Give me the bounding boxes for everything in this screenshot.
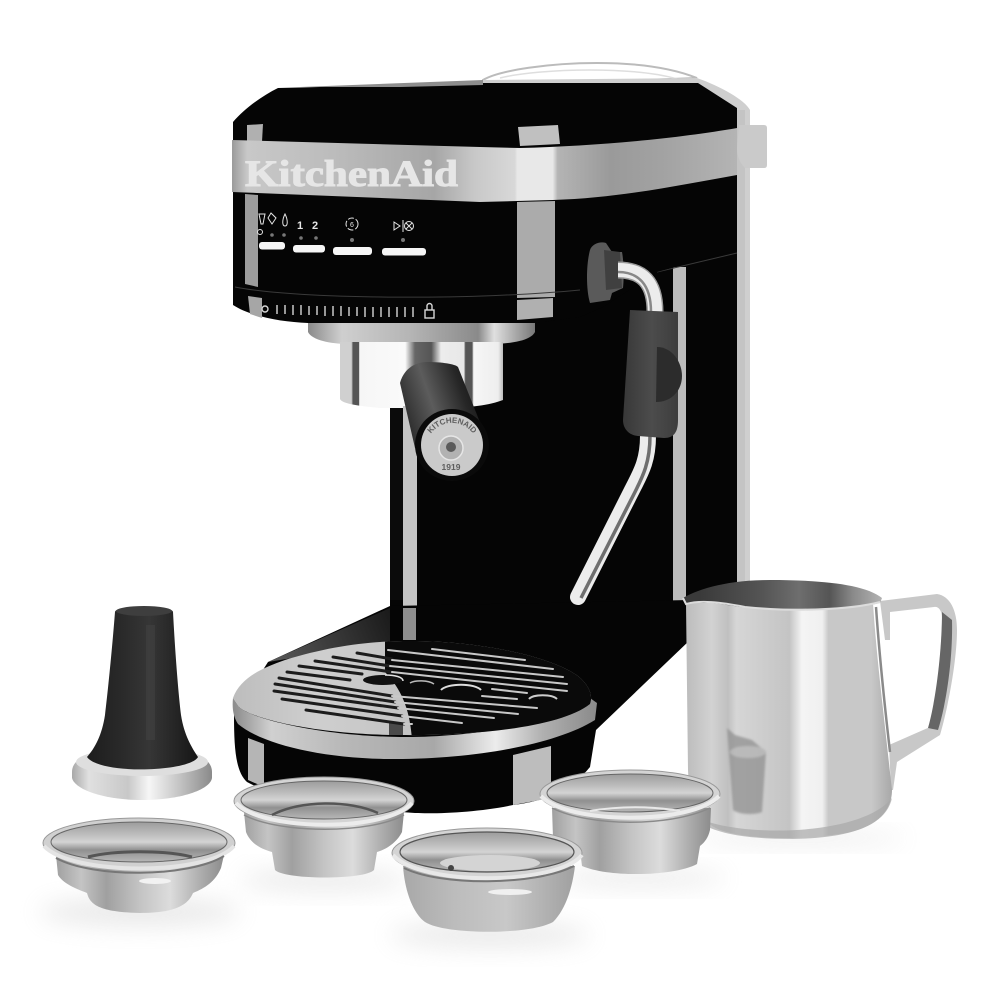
drain holes — [363, 675, 557, 699]
machine rear column — [390, 150, 737, 640]
brand logo: KitchenAid — [245, 154, 458, 195]
tamper — [72, 606, 212, 800]
jug reflection of filter basket — [727, 728, 766, 814]
control panel labels: 6 — [350, 222, 354, 229]
right chrome stripe — [673, 267, 686, 632]
milk jug — [683, 580, 957, 839]
jug rim opening — [683, 580, 882, 609]
control panel labels — [258, 213, 414, 234]
handle medallion — [421, 414, 483, 476]
head reflections — [247, 124, 263, 142]
handle medallion: 1919 — [442, 462, 461, 472]
tray grate plate — [233, 641, 591, 735]
portafilter — [340, 342, 503, 476]
filter basket: front left — [43, 818, 235, 913]
grind scale ticks and lock — [262, 304, 434, 318]
chrome band — [232, 128, 737, 202]
head top highlight — [300, 80, 483, 87]
reservoir side cap — [737, 125, 767, 168]
control panel labels: 1 — [297, 220, 303, 232]
steam wand assembly — [578, 242, 682, 598]
base reflections — [248, 738, 264, 787]
sleeve grip tab — [656, 347, 682, 402]
drip tray with grate — [233, 640, 620, 759]
filter basket: back right — [540, 770, 720, 874]
group head collar — [308, 323, 535, 344]
tray chrome rim — [233, 698, 597, 759]
machine head — [232, 80, 737, 323]
control panel labels: 2 — [312, 220, 318, 232]
rubber sleeve — [623, 310, 678, 438]
tamper black handle — [87, 607, 198, 769]
indicator lights — [270, 233, 405, 242]
filter basket: back left — [234, 777, 414, 878]
left chrome stripe — [403, 400, 417, 608]
jug body — [686, 603, 892, 838]
portafilter handle — [400, 362, 487, 448]
filter basket: front centre — [392, 828, 582, 932]
portafilter basket — [340, 342, 503, 408]
control buttons — [259, 242, 426, 256]
handle medallion: KITCHENAID — [427, 417, 476, 434]
lower chrome wand — [578, 436, 648, 597]
column left edge — [390, 408, 403, 600]
steam knob mount — [587, 242, 624, 303]
grate slots — [274, 649, 567, 724]
ground shadows — [40, 832, 905, 947]
water reservoir frame and clear lid — [483, 63, 767, 582]
upper chrome pipe — [618, 270, 655, 312]
machine base and wing — [234, 600, 690, 813]
jug handle — [880, 594, 957, 790]
tamper steel base — [72, 747, 212, 800]
head underside edge — [657, 253, 737, 272]
head black shell — [233, 83, 737, 323]
